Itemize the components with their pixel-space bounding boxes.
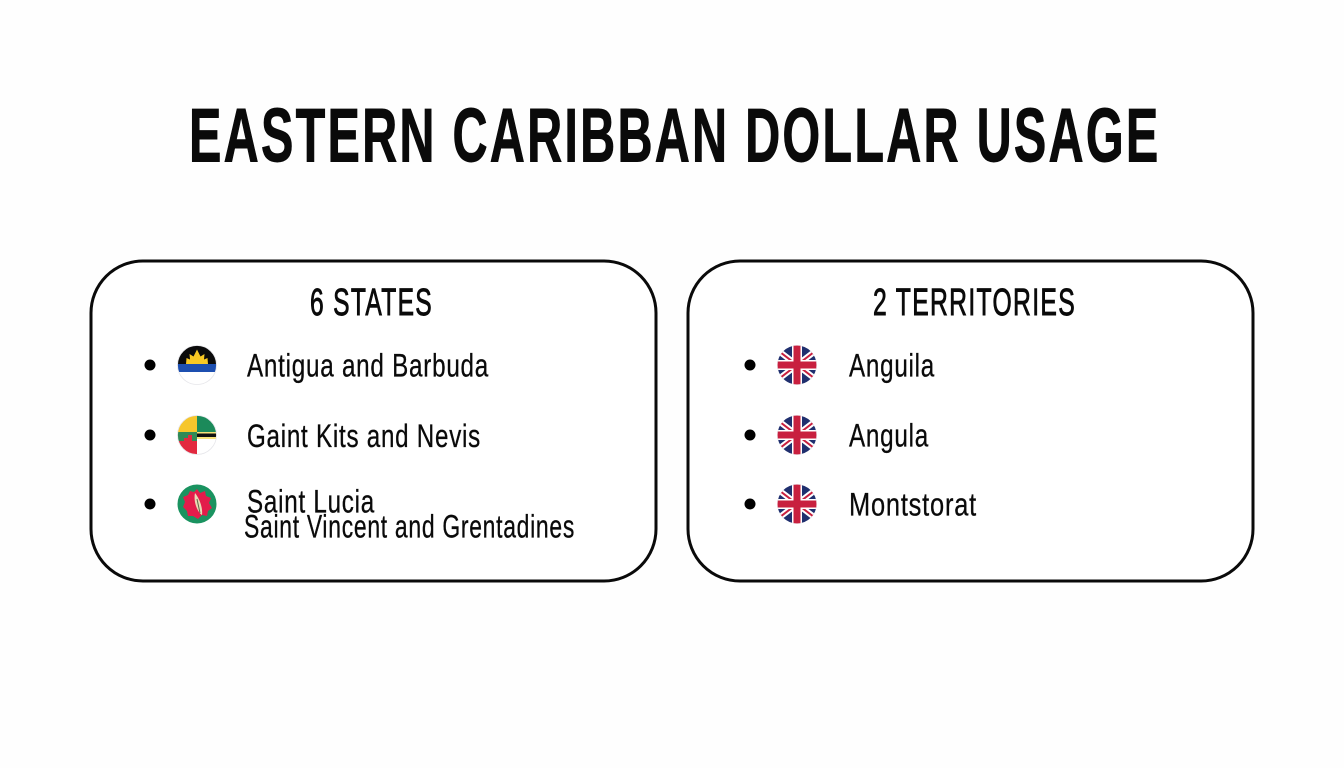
list item: Saint Lucia xyxy=(144,484,375,524)
heading: 6 states: 6 STATES xyxy=(310,282,433,324)
list item: Saint Vincent and Grentadines: Saint Vincent and Grentadines xyxy=(244,508,575,544)
list item: Montstorat: Montstorat xyxy=(849,486,977,522)
icon: UK flag xyxy=(778,416,816,454)
list item: Gaint Kits and Nevis: Gaint Kits and Nevis xyxy=(247,418,481,454)
panel: 2 territories xyxy=(688,261,1253,581)
list item: Antigua and Barbuda: Antigua and Barbuda xyxy=(247,348,489,384)
list item: Montstorat xyxy=(744,483,977,525)
list item: Anguila xyxy=(744,344,935,386)
list item: Saint Lucia: Saint Lucia xyxy=(247,484,375,520)
icon: UK flag xyxy=(778,484,816,524)
heading: 2 territories: 2 TERRITORIES xyxy=(873,282,1076,324)
icon: Saint Kitts style flag xyxy=(177,415,217,455)
list item: Angula xyxy=(744,414,929,456)
icon: Antigua and Barbuda flag xyxy=(178,346,216,372)
list item: Gaint Kits and Nevis xyxy=(144,415,481,455)
list item: Antigua and Barbuda xyxy=(144,345,489,385)
list item: Angula: Angula xyxy=(849,418,929,454)
icon: UK flag xyxy=(778,346,816,384)
icon: Saint Lucia flag xyxy=(178,484,216,524)
list item: Anguila: Anguila xyxy=(849,348,935,384)
panel: 6 states xyxy=(91,261,656,581)
